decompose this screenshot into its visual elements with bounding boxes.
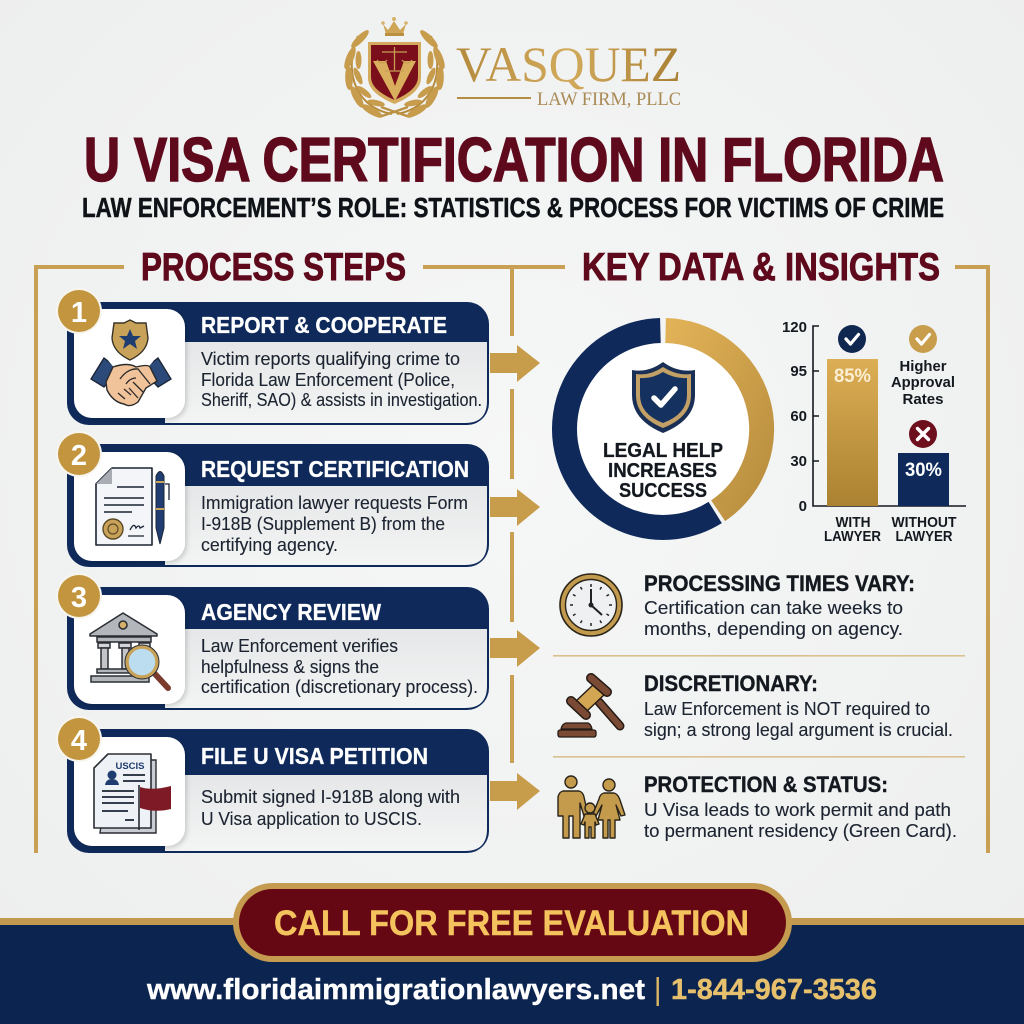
step 2 text: I-918B (Supplement B) from the (201, 514, 445, 534)
step 3 text: certification (discretionary process). (201, 677, 478, 697)
insight text: sign; a strong legal argument is crucial. (644, 720, 953, 740)
insight text: to permanent residency (Green Card). (644, 821, 957, 841)
donut label: INCREASES (608, 460, 717, 482)
panel: step 3 (56, 573, 489, 710)
step 2 title: REQUEST CERTIFICATION (201, 456, 469, 482)
insight text: Law Enforcement is NOT required to (644, 699, 930, 719)
icon: police badge and handshake (91, 320, 171, 406)
step 4 text (201, 787, 460, 829)
logo: Vasquez Law Firm (342, 17, 681, 120)
insight text (644, 699, 953, 740)
insight: discretionary (558, 671, 953, 740)
insight text: months, depending on agency. (644, 619, 903, 639)
footer band (0, 918, 1024, 1024)
phone number: 1-844-967-3536 (671, 974, 877, 1006)
heading: process steps: PROCESS STEPS (141, 246, 406, 289)
insight: processing times (560, 571, 915, 639)
icon: shield with check (632, 362, 695, 433)
bar labels: WITHOUT (892, 514, 956, 531)
step 4 text: Submit signed I-918B along with (201, 787, 460, 807)
donut chart: legal help increases success (565, 330, 762, 527)
call to action button (233, 883, 792, 962)
icon: laurel wreath (342, 28, 447, 120)
panel: step 2 (56, 431, 489, 567)
logo tagline: LAW FIRM, PLLC (537, 89, 681, 110)
icon: clock (560, 574, 622, 636)
step 4 number (56, 716, 102, 762)
callout: higher approval rates: Rates (902, 391, 944, 408)
bar labels: LAWYER (824, 528, 881, 545)
icon: family (558, 776, 625, 838)
donut label: SUCCESS (619, 480, 707, 502)
bar labels (824, 514, 956, 545)
icon: gold check (909, 325, 937, 353)
step 2 text: certifying agency. (201, 535, 338, 555)
step 2 text (201, 493, 468, 555)
donut label: LEGAL HELP (603, 440, 723, 462)
logo wordmark: VASQUEZ (456, 36, 681, 92)
callout: higher approval rates (891, 358, 955, 408)
step 3 text: Law Enforcement verifies (201, 636, 398, 656)
insight: protection and status (558, 772, 957, 841)
heading: key data and insights: KEY DATA & INSIGHTS (582, 246, 940, 289)
insight text: Certification can take weeks to (644, 598, 903, 618)
step 2 number: 2 (71, 440, 87, 472)
step 1 number (56, 288, 102, 334)
axis labels: 95 (790, 363, 807, 380)
bar: with lawyer 85%: 85% (834, 366, 871, 387)
insight text: U Visa leads to work permit and path (644, 800, 951, 820)
arrow: step 1 to data (490, 345, 540, 382)
call to action button: CALL FOR FREE EVALUATION (274, 904, 749, 943)
bar chart: approval rates (782, 319, 966, 545)
bar labels: WITH (836, 514, 870, 531)
icon: crown (381, 17, 408, 36)
axis labels: 120 (782, 319, 807, 336)
arrow: step 3 to data (490, 630, 540, 667)
bar: with lawyer 85% (827, 359, 878, 506)
bar labels: LAWYER (896, 528, 953, 545)
insight heading: PROTECTION & STATUS: (644, 772, 888, 797)
arrow: step 2 to data (490, 489, 540, 526)
axis labels: 30 (790, 453, 807, 470)
arrow: step 4 to data (490, 773, 540, 810)
step 3 number: 3 (71, 582, 87, 614)
step 3 text: helpfulness & signs the (201, 657, 379, 677)
step 3 title: AGENCY REVIEW (201, 599, 381, 625)
step 1 text: Sheriff, SAO) & assists in investigation. (201, 390, 482, 410)
panel: step 1 (56, 288, 489, 425)
icon: USCIS petition and flag: USCIS (115, 761, 145, 772)
icon: gavel (558, 678, 620, 737)
panel: step 4 (56, 716, 489, 853)
step 4 number: 4 (71, 725, 87, 757)
icon: courthouse and magnifier (90, 613, 168, 688)
callout: higher approval rates: Approval (891, 374, 955, 391)
step 1 text (201, 349, 482, 410)
donut label (603, 440, 723, 502)
bar: without lawyer 30% (898, 453, 949, 506)
insight heading: DISCRETIONARY: (644, 671, 818, 696)
step 2 number (56, 431, 102, 477)
insight text (644, 800, 957, 841)
axis labels: 0 (799, 498, 807, 515)
step 1 number: 1 (71, 297, 87, 329)
bar: without lawyer 30%: 30% (905, 460, 942, 481)
step 1 text: Florida Law Enforcement (Police, (201, 370, 455, 390)
step 4 text: U Visa application to USCIS. (201, 809, 422, 829)
icon: certified document and pen (96, 468, 169, 545)
step 3 number (56, 573, 102, 619)
step 1 text: Victim reports qualifying crime to (201, 349, 460, 369)
insight text (644, 598, 903, 639)
icon: crest shield (368, 42, 421, 104)
icon: maroon x (909, 420, 937, 448)
step 3 text (201, 636, 478, 697)
axis labels: 60 (790, 408, 807, 425)
step 4 title: FILE U VISA PETITION (201, 743, 428, 769)
step 1 title: REPORT & COOPERATE (201, 312, 447, 338)
insight heading: PROCESSING TIMES VARY: (644, 571, 915, 596)
axis labels (782, 319, 807, 515)
website: www.floridaimmigrationlawyers.net (146, 974, 645, 1006)
step 2 text: Immigration lawyer requests Form (201, 493, 468, 513)
icon: USCIS petition and flag (94, 754, 171, 833)
icon: navy check (838, 325, 866, 353)
callout: higher approval rates: Higher (900, 358, 947, 375)
